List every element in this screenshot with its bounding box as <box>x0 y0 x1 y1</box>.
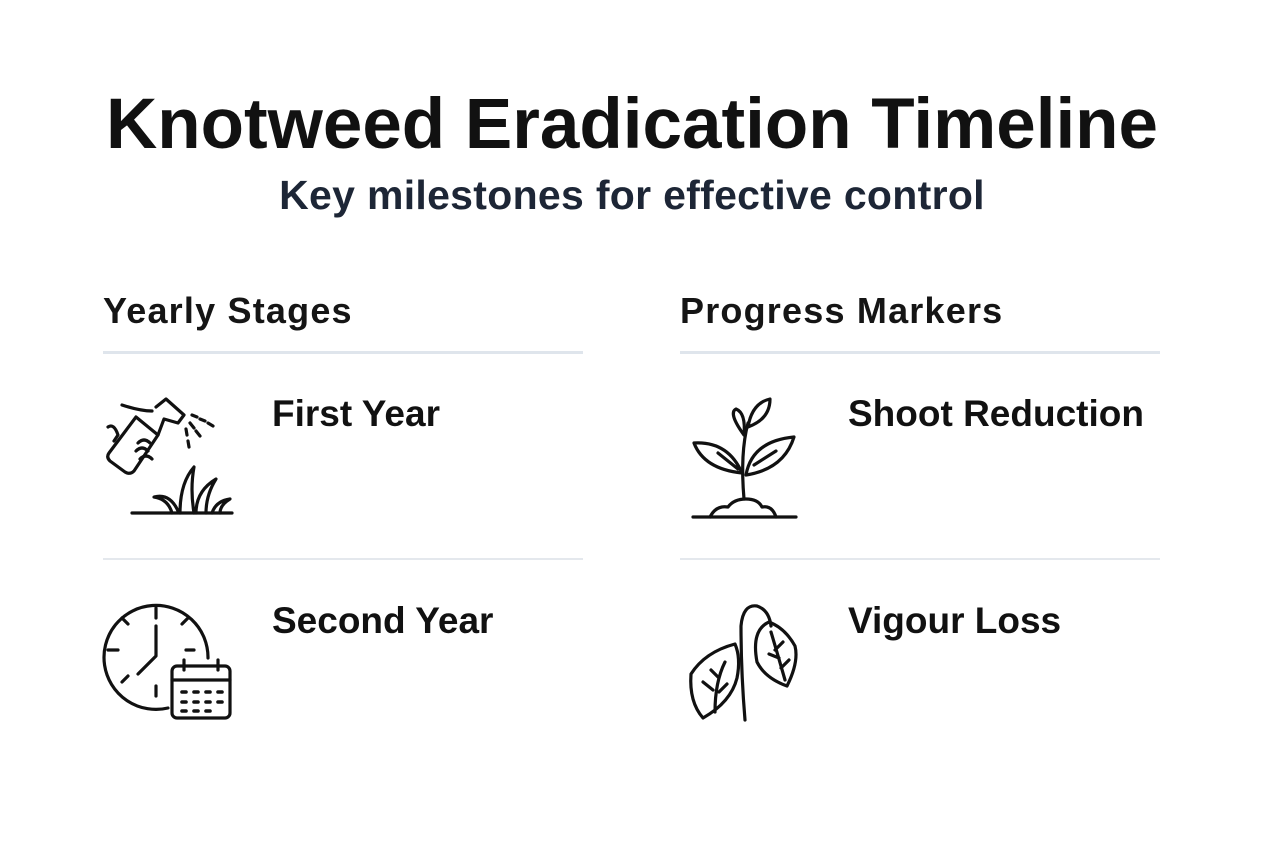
icon: sprouting plant <box>691 397 798 519</box>
item: first year: First Year <box>272 393 440 434</box>
heading: progress markers: Progress Markers <box>680 290 1003 331</box>
icon: clock and calendar <box>102 604 232 720</box>
heading: yearly stages: Yearly Stages <box>103 290 353 331</box>
item: vigour loss: Vigour Loss <box>848 600 1061 641</box>
item: second year: Second Year <box>272 600 493 641</box>
subtitle: Key milestones for effective control <box>279 172 985 218</box>
icon: wilting leaves <box>689 604 798 722</box>
title: Knotweed Eradication Timeline <box>106 85 1158 164</box>
icon: spray bottle and grass <box>106 397 234 515</box>
item: shoot reduction: Shoot Reduction <box>848 393 1144 434</box>
